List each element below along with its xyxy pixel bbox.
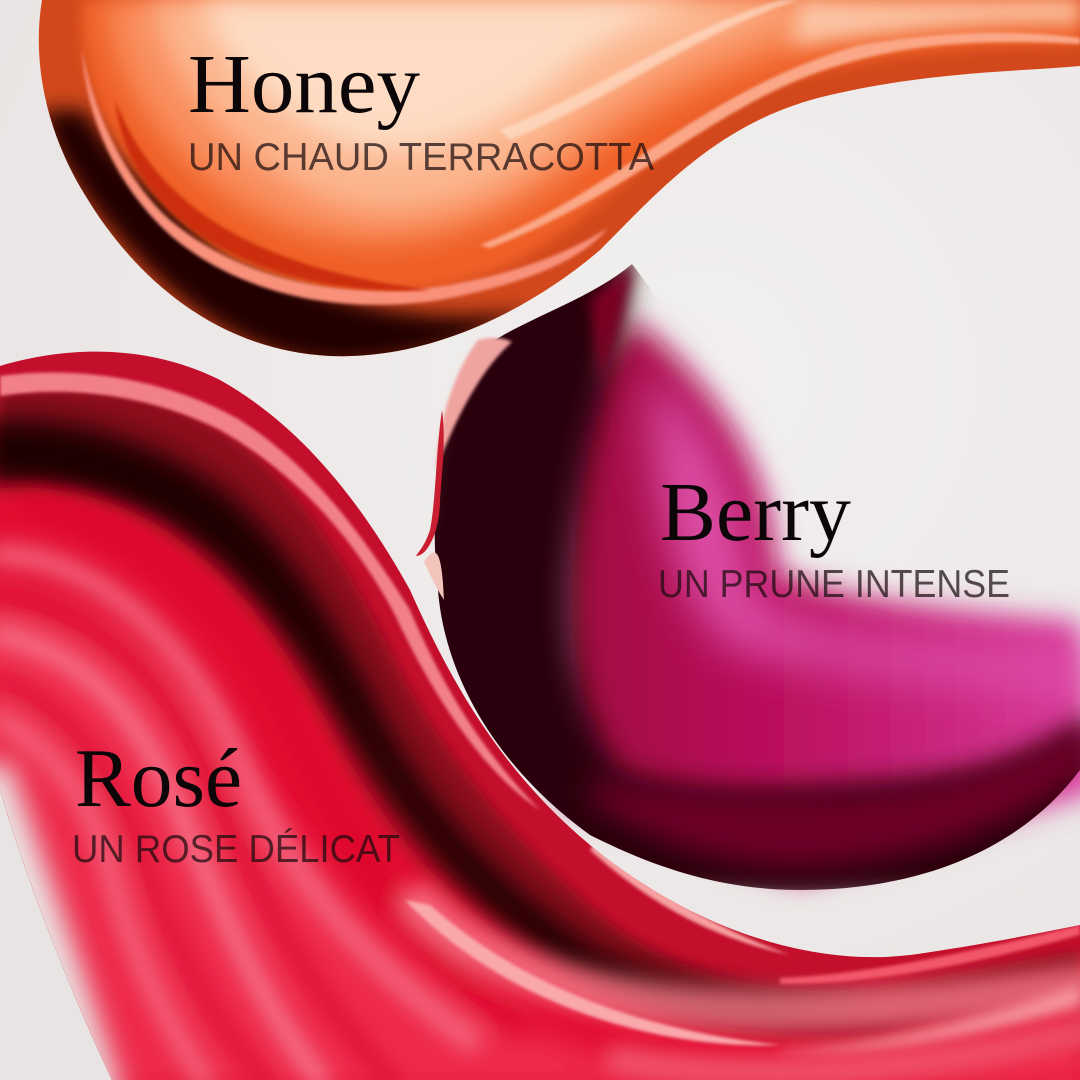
panel: rose swatch — [0, 340, 1080, 1080]
soft lower-left edge — [0, 770, 95, 1080]
magenta body — [560, 320, 1080, 880]
brush streaks — [0, 505, 1080, 1080]
subtitle: Rosé shade: UN ROSE DÉLICAT — [72, 828, 400, 871]
title: Berry: Berry — [660, 466, 851, 559]
title: Honey: Honey — [188, 38, 420, 131]
subtitle: Honey shade: UN CHAUD TERRACOTTA — [188, 136, 654, 179]
gloss highlights — [82, 0, 1080, 305]
gloss highlights — [416, 338, 512, 600]
dark body — [400, 240, 1080, 900]
panel: honey swatch — [0, 0, 1080, 370]
subtitle: Berry shade: UN PRUNE INTENSE — [658, 563, 1010, 606]
title: Rosé: Rosé — [75, 732, 242, 825]
gloss highlights — [0, 373, 1080, 1052]
panel: berry swatch — [400, 240, 1080, 900]
